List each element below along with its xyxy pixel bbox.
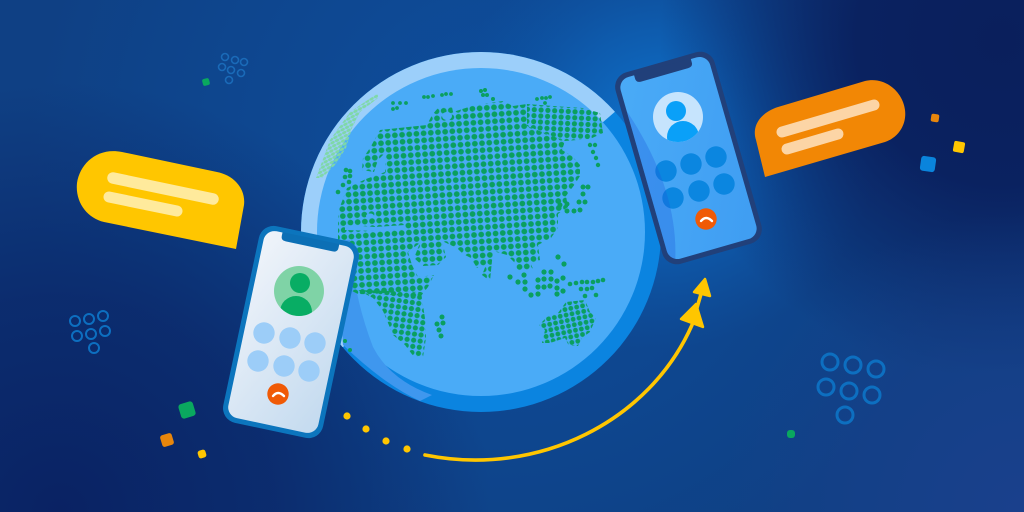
rings cluster bottom left	[70, 311, 110, 353]
phone body	[612, 48, 765, 268]
contact avatar	[274, 266, 324, 316]
islands dots	[336, 88, 605, 352]
dotted start of call path	[343, 412, 411, 453]
globe face	[317, 68, 645, 396]
phone: left caller	[220, 223, 362, 441]
globe	[301, 52, 661, 412]
arrowhead lower	[681, 304, 703, 327]
northeast asia dots	[527, 104, 603, 141]
phone notch	[634, 59, 693, 83]
green confetti bottom right	[787, 430, 795, 438]
speech bubble: yellow	[77, 151, 244, 249]
phone screen	[226, 229, 356, 435]
green confetti top left	[202, 78, 210, 86]
confetti bottom left	[160, 401, 207, 459]
bubble text lines	[109, 178, 213, 211]
end call button	[267, 383, 289, 405]
curved line	[425, 294, 701, 460]
bubble text lines	[782, 105, 874, 149]
phone: right receiver	[615, 52, 762, 264]
keypad	[655, 146, 735, 209]
eurasia dots	[338, 101, 580, 296]
australia dots	[539, 300, 596, 346]
contact avatar	[653, 92, 703, 142]
speech bubble: orange	[755, 80, 905, 177]
globe ring	[301, 52, 661, 412]
globe shaded crescent	[335, 240, 432, 401]
keypad	[247, 322, 326, 382]
faint americas dots	[316, 93, 378, 178]
arrowhead upper	[694, 279, 710, 296]
inland seas	[345, 112, 452, 231]
arrow: call path	[343, 279, 710, 460]
globe light cap	[301, 52, 615, 347]
phone screen	[618, 54, 759, 262]
africa dots	[358, 290, 426, 357]
confetti top right	[920, 113, 965, 172]
rings cluster bottom right	[818, 354, 884, 423]
phone notch	[281, 232, 339, 252]
end call button	[695, 208, 717, 230]
phone body	[220, 223, 362, 441]
rings cluster top left	[218, 54, 248, 84]
globe shadow through screen	[627, 112, 676, 258]
